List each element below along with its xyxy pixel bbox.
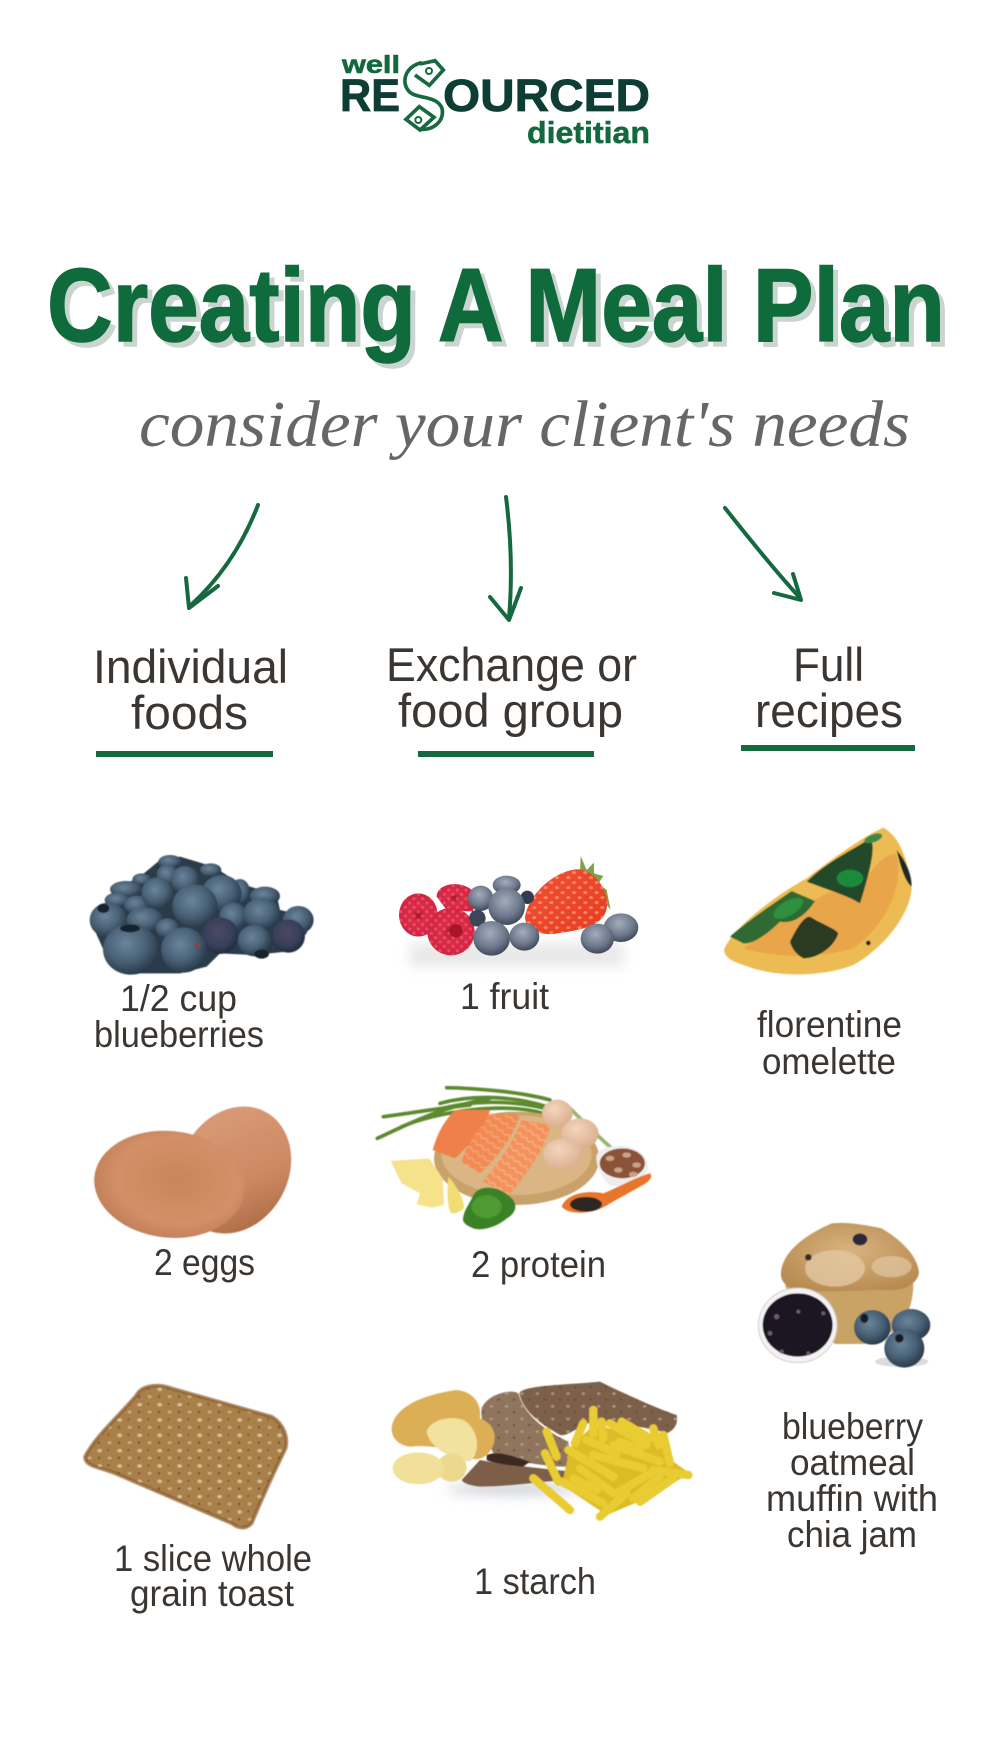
label: blueberry oatmeal muffin with chia jam: blueberry <box>782 1406 923 1447</box>
label: florentine omelette: omelette <box>762 1041 896 1082</box>
label: blueberry oatmeal muffin with chia jam: muffin with <box>766 1478 938 1519</box>
arrow: to exchange or food group <box>490 497 521 620</box>
heading: individual foods <box>93 640 288 757</box>
logo wordmark: dietitian: dietitian <box>527 115 650 150</box>
image: mixed berries <box>399 856 638 967</box>
label: 1 starch: 1 starch <box>474 1561 596 1602</box>
heading: full recipes: recipes <box>755 684 903 737</box>
heading: individual foods: Individual <box>93 640 288 693</box>
image: eggs <box>89 1086 313 1254</box>
label: 1 slice whole grain toast <box>114 1538 312 1614</box>
label: 2 protein: 2 protein <box>471 1244 606 1285</box>
heading: exchange or food group <box>386 638 637 757</box>
image: florentine omelette <box>724 828 912 974</box>
image: starch group <box>392 1382 690 1517</box>
icon: money S <box>405 61 443 130</box>
label: 1 slice whole grain toast: grain toast <box>130 1573 295 1614</box>
image: blueberries <box>90 855 314 975</box>
heading: full recipes: Full <box>793 638 864 691</box>
label: florentine omelette <box>757 1004 902 1082</box>
logo wordmark: well: well <box>341 51 400 79</box>
label: 1/2 cup blueberries: 1/2 cup <box>120 978 237 1019</box>
label: 1 slice whole grain toast: 1 slice whole <box>114 1538 312 1579</box>
logo wordmark: RE: RE <box>340 70 400 121</box>
label: 1 fruit: 1 fruit <box>460 976 550 1017</box>
label: blueberry oatmeal muffin with chia jam: oatmeal <box>790 1442 915 1483</box>
label: blueberry oatmeal muffin with chia jam: chia jam <box>787 1514 917 1555</box>
logo <box>340 51 650 150</box>
image: protein plate <box>377 1088 651 1229</box>
heading: full recipes <box>741 638 915 751</box>
label: florentine omelette: florentine <box>757 1004 902 1045</box>
arrow: to full recipes <box>725 508 801 600</box>
heading: exchange or food group: Exchange or <box>386 638 637 691</box>
heading: exchange or food group: food group <box>398 684 623 737</box>
label: 1/2 cup blueberries: blueberries <box>94 1014 264 1055</box>
logo wordmark: OURCED: OURCED <box>443 70 650 121</box>
image: muffin with jam and blueberries <box>758 1223 930 1368</box>
label: blueberry oatmeal muffin with chia jam <box>766 1406 938 1555</box>
label: 1/2 cup blueberries <box>94 978 264 1055</box>
subtitle: consider your client's needs <box>139 388 910 461</box>
heading: individual foods: foods <box>131 686 248 739</box>
arrow: to individual foods <box>186 505 258 608</box>
image: whole grain toast <box>85 1386 286 1528</box>
label: 2 eggs: 2 eggs <box>154 1242 255 1283</box>
